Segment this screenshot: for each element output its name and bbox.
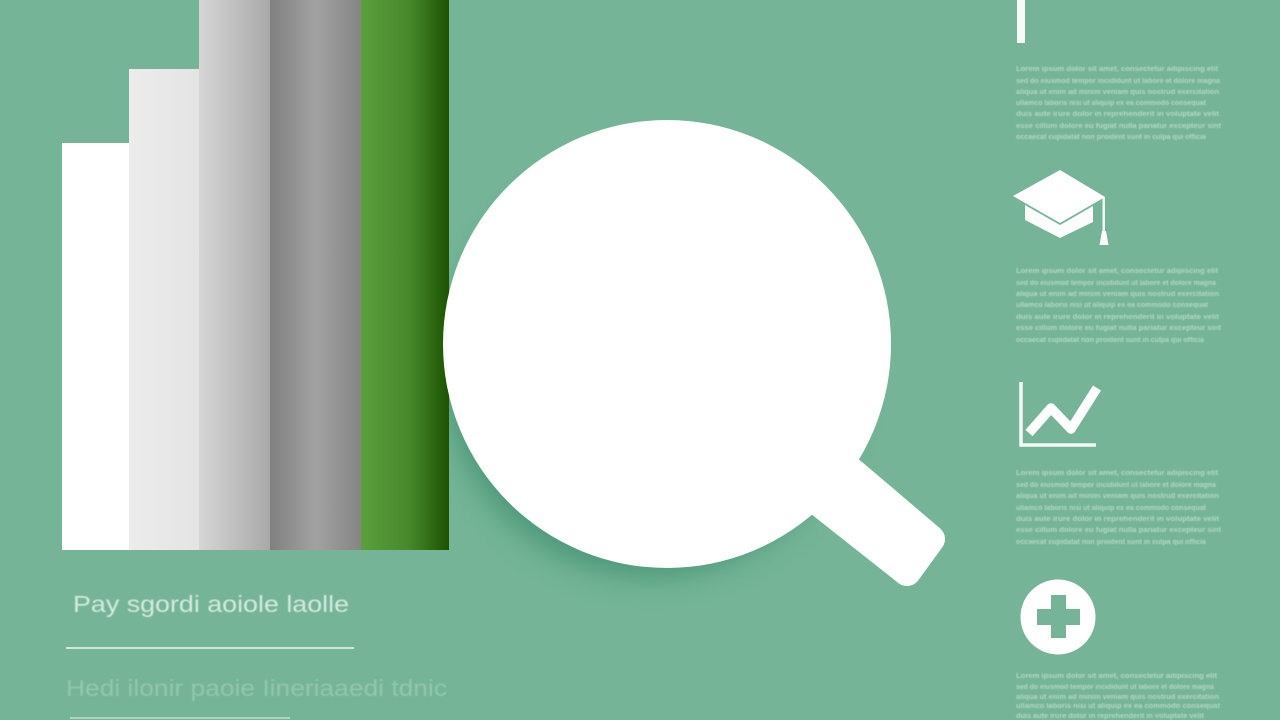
text block 2: sed do eiusmod tempor incididunt ut labore et dolore magna — [1016, 280, 1216, 287]
icon: line chart — [1021, 382, 1097, 445]
text block 4 — [1016, 673, 1221, 720]
text block 4: sed do eiusmod tempor incididunt ut labore et dolore magna — [1016, 684, 1214, 691]
text block 2: duis aute irure dolor in reprehenderit in voluptate velit — [1016, 314, 1220, 321]
text block 4: Lorem ipsum dolor sit amet, consectetur adipiscing elit — [1016, 673, 1218, 680]
text block 1: occaecat cupidatat non proident sunt in culpa qui officia — [1016, 134, 1206, 141]
cross — [1037, 595, 1080, 638]
text block 2: aliqua ut enim ad minim veniam quis nostrud exercitation — [1016, 291, 1219, 298]
bar 4 dark grey — [270, 0, 361, 550]
tassel cord — [1102, 197, 1105, 233]
text block 2 — [1016, 268, 1222, 344]
text block 1: duis aute irure dolor in reprehenderit in voluptate velit — [1016, 111, 1220, 118]
icon: medical cross — [1020, 580, 1096, 654]
icon: graduation cap — [1013, 170, 1108, 245]
text block 2: occaecat cupidatat non proident sunt in culpa qui officia — [1016, 337, 1204, 344]
text block 1: esse cillum dolore eu fugiat nulla pariatur excepteur sint — [1016, 123, 1222, 130]
chart axes — [1021, 382, 1096, 445]
text block 4: aliqua ut enim ad minim veniam quis nostrud exercitation — [1016, 694, 1219, 701]
text block 4: duis aute irure dolor in reprehenderit in voluptate velit — [1016, 713, 1205, 720]
bar 2 light grey — [129, 69, 199, 550]
text block 2: ullamco laboris nisi ut aliquip ex ea commodo consequat — [1016, 302, 1209, 309]
magnifier shadow — [445, 167, 855, 577]
icon: top bar — [1017, 0, 1025, 43]
bottom rule — [70, 717, 290, 719]
text block 3: occaecat cupidatat non proident sunt in culpa qui officia — [1016, 539, 1206, 546]
bar chart — [62, 0, 449, 550]
text block 3: aliqua ut enim ad minim veniam quis nostrud exercitation — [1016, 493, 1219, 500]
text block 2: Lorem ipsum dolor sit amet, consectetur adipiscing elit — [1016, 268, 1219, 275]
heading rule — [66, 647, 354, 649]
text block 1: Lorem ipsum dolor sit amet, consectetur adipiscing elit — [1016, 66, 1219, 73]
tassel — [1100, 231, 1108, 245]
bar 1 white — [62, 143, 130, 550]
text block 3: duis aute irure dolor in reprehenderit in voluptate velit — [1016, 516, 1220, 523]
text block 3: esse cillum dolore eu fugiat nulla pariatur excepteur sint — [1016, 527, 1222, 534]
text block 3: sed do eiusmod tempor incididunt ut labore et dolore magna — [1016, 482, 1216, 489]
bar 3 grey — [199, 0, 270, 550]
cross circle — [1020, 580, 1096, 654]
text block 3: Lorem ipsum dolor sit amet, consectetur adipiscing elit — [1016, 470, 1219, 477]
text block 2: esse cillum dolore eu fugiat nulla pariatur excepteur sint — [1016, 325, 1222, 332]
chart trend line — [1029, 388, 1097, 433]
text block 1: ullamco laboris nisi ut aliquip ex ea commodo consequat — [1016, 100, 1207, 107]
magnifier handle — [821, 471, 931, 572]
text block 1: aliqua ut enim ad minim veniam quis nostrud exercitation — [1016, 89, 1219, 96]
magnifier lens — [443, 120, 891, 568]
text block 1: sed do eiusmod tempor incididunt ut labore et dolore magna — [1016, 78, 1220, 85]
heading: Pay sgordi aoiole laolle — [73, 591, 349, 617]
text block 4: ullamco laboris nisi ut aliquip ex ea commodo consequat — [1016, 703, 1221, 710]
text block 3: ullamco laboris nisi ut aliquip ex ea commodo consequat — [1016, 505, 1207, 512]
subheading: Hedi ilonir paoie Iineriaaedi tdnic — [66, 675, 447, 701]
cap base — [1025, 205, 1093, 238]
text block 3 — [1016, 470, 1222, 546]
bar 5 green — [361, 0, 449, 550]
icon: magnifying glass — [443, 120, 931, 572]
text block 1 — [1016, 66, 1222, 141]
cap board — [1013, 170, 1105, 223]
